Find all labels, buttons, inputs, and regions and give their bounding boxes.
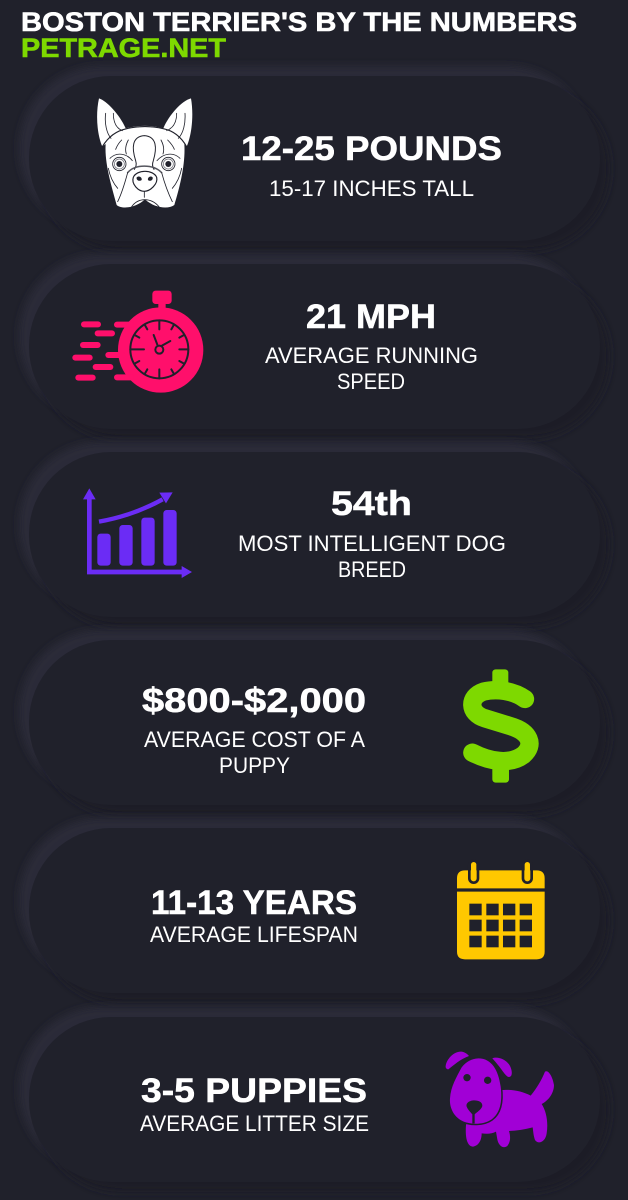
title (21, 7, 577, 63)
icon: dollar sign (472, 669, 530, 783)
text: lifespan (150, 884, 358, 947)
text: cost: AVERAGE COST OF A (144, 727, 365, 752)
text: litter size (140, 1072, 369, 1136)
panel: puppy cost (19, 630, 610, 815)
text: intelligence: BREED (338, 557, 406, 582)
text: intelligence: 54th (331, 485, 412, 523)
text: weight: 15-17 INCHES TALL (269, 176, 474, 201)
text: cost: $800-$2,000 (142, 682, 366, 720)
text: cost: PUPPY (219, 753, 290, 778)
text: intelligence (238, 485, 506, 582)
text: cost (142, 682, 366, 778)
text: speed: SPEED (337, 369, 405, 394)
text: weight: 12-25 POUNDS (241, 130, 502, 168)
text: speed: 21 MPH (306, 298, 436, 336)
icon: boston terrier head (97, 98, 192, 207)
panel: litter size (19, 1007, 610, 1192)
text: speed: AVERAGE RUNNING (265, 343, 478, 368)
icon: puppy (446, 1052, 554, 1147)
panel: lifespan (19, 818, 610, 1003)
title: BOSTON TERRIER'S BY THE NUMBERS (21, 7, 577, 37)
panel: intelligence (19, 442, 610, 627)
text: litter size: 3-5 PUPPIES (141, 1072, 367, 1110)
panel: weight and height (19, 66, 610, 251)
text: weight (241, 130, 502, 201)
icon: rising bar chart (83, 488, 192, 578)
text: lifespan: AVERAGE LIFESPAN (150, 922, 358, 947)
icon: stopwatch (72, 291, 203, 393)
text: litter size: AVERAGE LITTER SIZE (140, 1111, 369, 1136)
icon: calendar (457, 861, 545, 959)
panel: running speed (19, 254, 610, 439)
text: speed (265, 298, 478, 394)
text: intelligence: MOST INTELLIGENT DOG (238, 531, 506, 556)
title: PETRAGE.NET (21, 33, 227, 63)
text: lifespan: 11-13 YEARS (151, 884, 357, 922)
